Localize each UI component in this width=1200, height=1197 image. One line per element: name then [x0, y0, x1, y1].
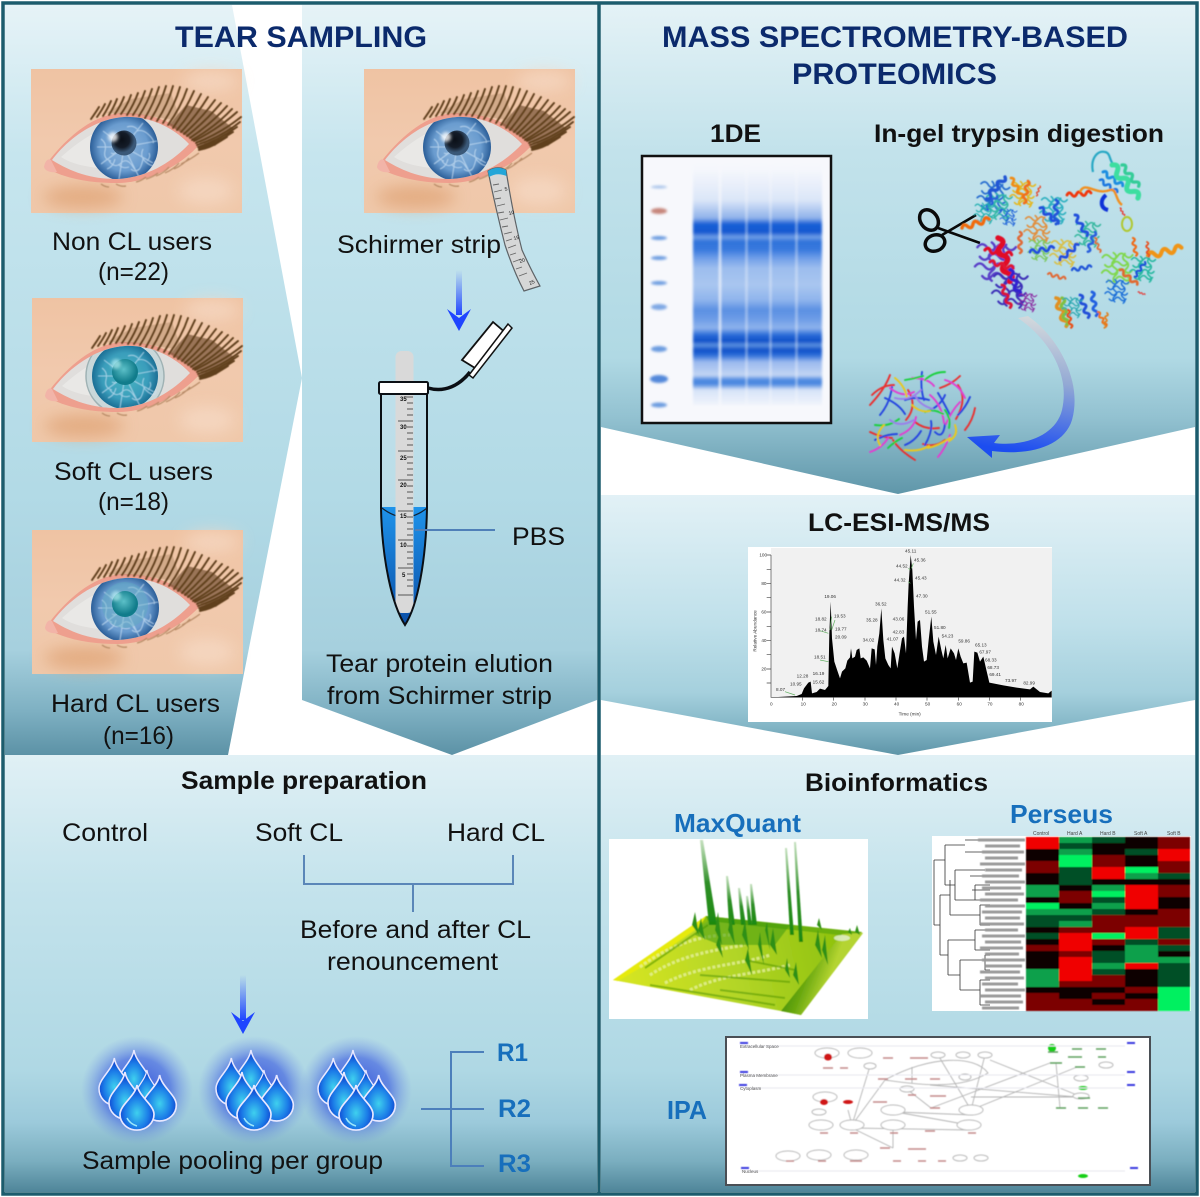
chart: chromatogram: 40 [894, 702, 900, 707]
column headers: Hard A [1067, 831, 1083, 837]
chart: chromatogram: 43.06 [893, 617, 905, 622]
eye: soft CL users [32, 298, 243, 442]
group labels: Soft CL [255, 819, 343, 847]
chart: chromatogram: 10 [801, 702, 806, 707]
panel: Schirmer strip elution [302, 5, 597, 755]
compartment labels: Plasma Membrane [740, 1073, 778, 1078]
labels: replicates R1 R2 R3 [497, 1039, 531, 1178]
label: hard CL users [51, 690, 220, 750]
protein: multicolour top left [961, 175, 1041, 230]
chart: chromatogram: 47.30 [916, 593, 928, 598]
chart: chromatogram: 12.28 [797, 673, 809, 678]
chart: Perseus heatmap [932, 831, 1191, 1011]
title: mass spectrometry-based proteomics [662, 21, 1128, 91]
label: non CL users: (n=22) [98, 258, 169, 286]
panel: bioinformatics [601, 755, 1195, 1192]
heading: 1DE: 1DE [710, 120, 761, 148]
heading: bioinformatics: Bioinformatics [805, 769, 988, 797]
label: soft CL users: (n=18) [98, 488, 169, 516]
title: mass spectrometry-based proteomics: MASS SPECTROMETRY-BASED [662, 21, 1128, 54]
label: non CL users [52, 228, 212, 286]
chart: chromatogram: 19.77 [835, 627, 847, 632]
compartment labels: Nucleus [742, 1169, 759, 1174]
chart: chromatogram: 82.99 [1023, 680, 1035, 685]
protein: central ring [1018, 197, 1101, 280]
chart: chromatogram: 45.11 [905, 548, 917, 553]
label: soft CL users: Soft CL users [54, 458, 213, 486]
eye with Schirmer strip [364, 69, 575, 213]
up-regulated nodes [820, 1054, 853, 1105]
label: non CL users: Non CL users [52, 228, 212, 256]
protein: teal helix top right [1067, 152, 1141, 231]
labels: replicates R1 R2 R3: R1 [497, 1039, 528, 1067]
icon: microtube with PBS: 15 [400, 514, 407, 520]
icon: tear drops control [81, 1036, 193, 1144]
heading: LC-ESI-MS/MS: LC-ESI-MS/MS [808, 509, 990, 537]
group labels [62, 819, 545, 847]
icon: microtube with PBS: 25 [400, 456, 407, 462]
protein: lower [1054, 292, 1108, 328]
illustration: peptides [870, 372, 975, 460]
chart: chromatogram: 50 [925, 702, 931, 707]
chart: chromatogram: 15.62 [813, 679, 825, 684]
label: soft CL users [54, 458, 213, 516]
chart: chromatogram: 0 [770, 702, 773, 707]
labels: replicates R1 R2 R3: R3 [498, 1150, 531, 1178]
chart: chromatogram: 54.23 [942, 634, 954, 639]
column headers: Soft B [1167, 831, 1181, 837]
chart: chromatogram: 65.13 [975, 643, 987, 648]
heading: sample preparation: Sample preparation [181, 767, 427, 795]
chart: chromatogram: 60 [957, 702, 962, 707]
chart: chromatogram: 80 [1019, 702, 1024, 707]
protein: red and purple [975, 237, 1037, 312]
panel: study groups tear sampling [5, 5, 302, 755]
label: Perseus: Perseus [1010, 799, 1113, 829]
chart: chromatogram: 45.43 [915, 575, 927, 580]
chart: chromatogram: 18.74 [815, 628, 827, 633]
chart: chromatogram: 16.19 [813, 671, 825, 676]
chart: chromatogram [748, 547, 1052, 722]
bracket: soft and hard CL [304, 855, 513, 912]
icon: scissors [916, 206, 980, 254]
chart: chromatogram: 20.09 [835, 635, 847, 640]
chart: chromatogram: 30 [863, 702, 868, 707]
title: mass spectrometry-based proteomics: PROTEOMICS [792, 58, 997, 91]
icon: Schirmer strip: 5 [504, 186, 508, 193]
chart: chromatogram: 19.53 [834, 613, 846, 618]
image: 1DE gel [642, 156, 831, 423]
chart: chromatogram: 40 [761, 638, 767, 643]
down-regulated nodes [1048, 1044, 1088, 1178]
arrow: down to pooling [231, 975, 255, 1034]
chart: chromatogram: 70 [987, 702, 993, 707]
text: before and after CL renouncement [300, 916, 531, 976]
chart: chromatogram: 68.73 [987, 665, 999, 670]
text: tear protein elution [326, 650, 553, 710]
chart: IPA network [726, 1037, 1150, 1185]
compartment markers [739, 1043, 1138, 1168]
chart: chromatogram: 80 [761, 581, 767, 586]
chart: chromatogram: 20 [832, 702, 837, 707]
chart: chromatogram: 44.52 [896, 563, 908, 568]
icon: microtube with PBS: 30 [400, 425, 407, 431]
compartment labels: Extracellular Space [740, 1044, 779, 1049]
dendrogram [934, 840, 990, 1005]
panel: LC-ESI-MS/MS [601, 495, 1195, 755]
network edges [848, 1055, 1077, 1148]
icon: Schirmer strip: 15 [513, 235, 520, 242]
heading: in-gel trypsin digestion: In-gel trypsin digestion [874, 120, 1164, 148]
text: before and after CL renouncement: Before and after CL [300, 916, 531, 944]
icon: microtube with PBS: 35 [400, 397, 407, 403]
chart: chromatogram: Time (min) [899, 711, 921, 716]
labels: replicates R1 R2 R3: R2 [498, 1095, 531, 1123]
icon: Schirmer strip: 20 [519, 257, 526, 265]
icon: Schirmer strip: 25 [528, 279, 536, 287]
panel: 1DE and digestion [601, 5, 1195, 494]
chart: chromatogram: 51.80 [934, 625, 946, 630]
chart: chromatogram: Relative Abundance [753, 610, 758, 652]
label: hard CL users: Hard CL users [51, 690, 220, 718]
text: tear protein elution: from Schirmer strip [327, 682, 552, 710]
icon: microtube with PBS [379, 322, 512, 625]
bracket: replicates [421, 1052, 484, 1166]
icon: microtube with PBS: 5 [402, 573, 406, 579]
chart: chromatogram: 18.51 [814, 654, 826, 659]
network nodes [776, 1048, 1113, 1161]
eye: hard CL users [32, 530, 243, 674]
chart: chromatogram: 8.07 [776, 687, 785, 692]
chart: chromatogram: 44.32 [894, 578, 906, 583]
icon: microtube with PBS: 20 [400, 483, 407, 489]
label: IPA: IPA [667, 1095, 707, 1125]
chart: chromatogram: 67.97 [979, 649, 991, 654]
label: PBS: PBS [512, 523, 565, 551]
compartment labels: Cytoplasm [740, 1086, 762, 1091]
icon: tear drops soft CL [198, 1036, 310, 1144]
chart: chromatogram: 73.97 [1005, 678, 1017, 683]
panel: sample preparation [5, 755, 597, 1192]
chart: chromatogram: 34.02 [863, 638, 875, 643]
icon: Schirmer strip: 10 [508, 210, 515, 217]
icon: Schirmer strip [488, 168, 540, 291]
chart: chromatogram: 42.83 [893, 629, 905, 634]
chart: chromatogram: 45.36 [914, 557, 926, 562]
chart: chromatogram: 18.82 [815, 617, 827, 622]
chart: chromatogram: 19.06 [824, 594, 836, 599]
text: tear protein elution: Tear protein elution [326, 650, 553, 678]
eye: non CL users [31, 69, 242, 213]
node labels [786, 1058, 976, 1161]
label: MaxQuant: MaxQuant [674, 808, 801, 838]
chart: chromatogram: 41.07 [887, 637, 899, 642]
chart: MaxQuant 3D map [609, 839, 868, 1019]
chart: chromatogram: 68.33 [985, 658, 997, 663]
pointer line to PBS [415, 529, 495, 531]
heatmap cells [1026, 837, 1190, 1011]
chart: chromatogram: 20 [761, 667, 767, 672]
chart: chromatogram: 36.52 [875, 601, 887, 606]
row labels [978, 840, 1025, 1008]
chart: chromatogram: 51.55 [925, 609, 937, 614]
label: Schirmer strip: Schirmer strip [337, 231, 501, 259]
arrow: digestion curve [967, 316, 1075, 458]
chart: chromatogram: 10.95 [790, 682, 802, 687]
title: tear sampling: TEAR SAMPLING [175, 21, 427, 54]
chart: chromatogram: 59.86 [958, 638, 970, 643]
icon: microtube with PBS: 10 [400, 543, 407, 549]
chart: chromatogram: 69.41 [989, 672, 1001, 677]
arrow: strip into tube [447, 270, 471, 331]
column headers [1033, 831, 1181, 837]
compartment labels [740, 1044, 779, 1174]
label: hard CL users: (n=16) [103, 722, 174, 750]
chart: chromatogram: 60 [761, 610, 767, 615]
text: sample pooling per group: Sample pooling per group [82, 1147, 383, 1175]
column headers: Soft A [1134, 831, 1148, 837]
group labels: Control [62, 819, 148, 847]
column headers: Hard B [1100, 831, 1116, 837]
illustration: protein structures [961, 152, 1182, 328]
text: before and after CL renouncement: renouncement [327, 948, 498, 976]
protein: right side [1100, 238, 1182, 303]
chart: chromatogram: 100 [759, 553, 768, 558]
group labels: Hard CL [447, 819, 545, 847]
chart: chromatogram: 35.28 [866, 618, 878, 623]
column headers: Control [1033, 831, 1049, 837]
icon: tear drops hard CL [300, 1036, 412, 1144]
